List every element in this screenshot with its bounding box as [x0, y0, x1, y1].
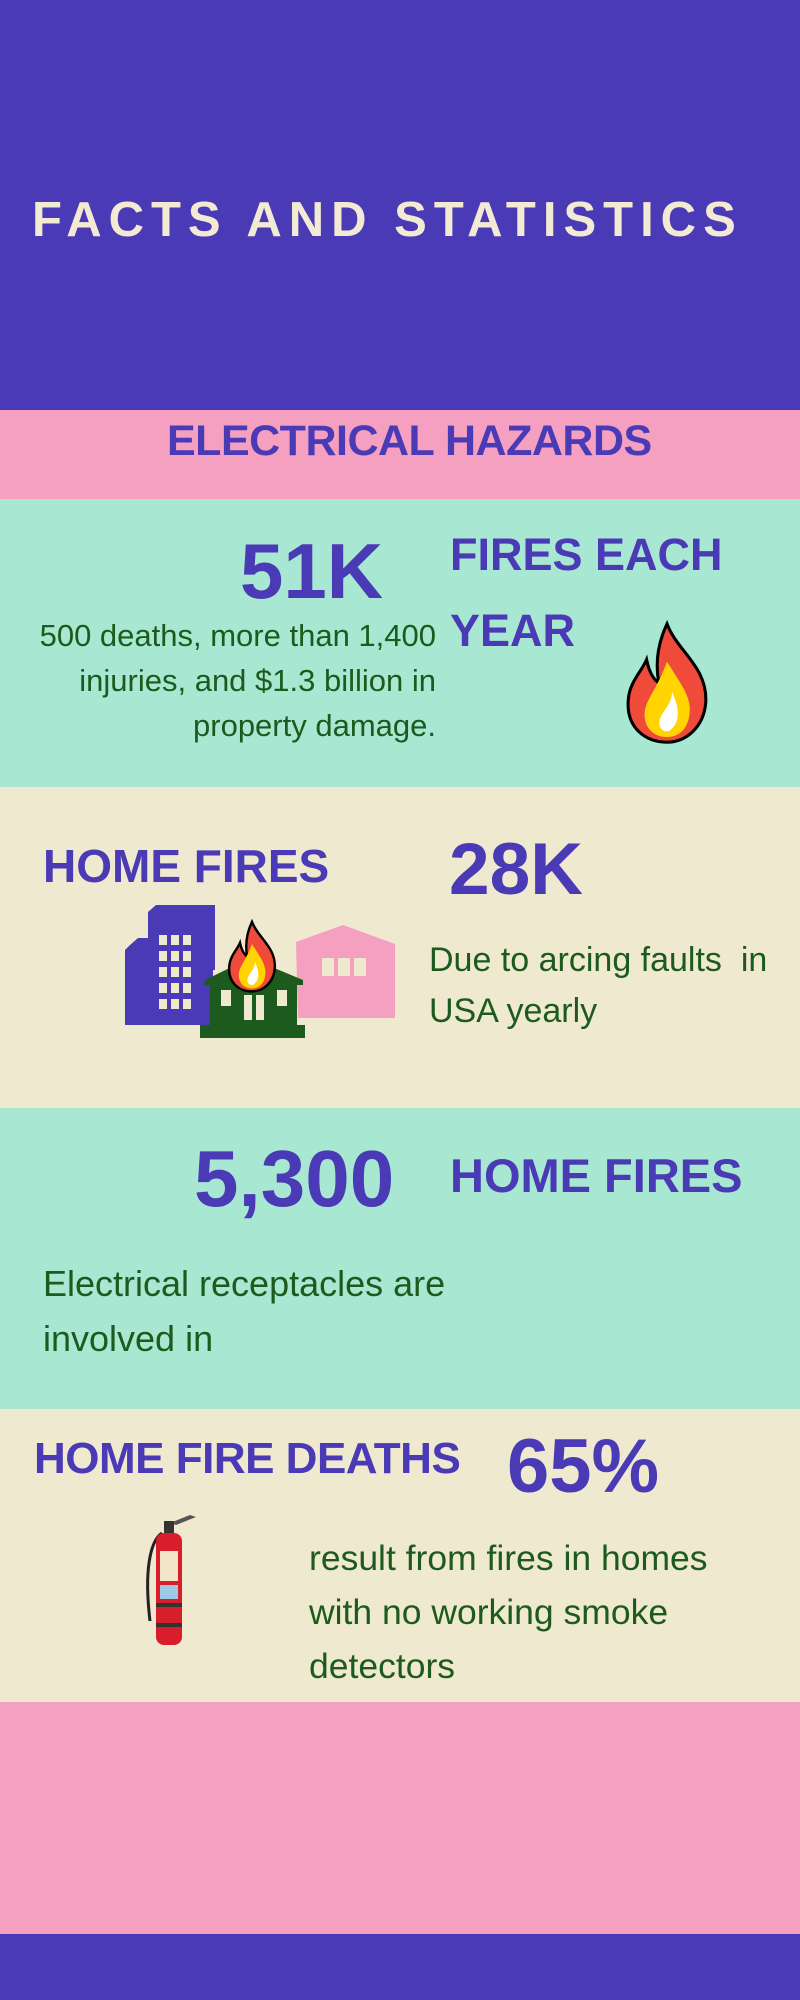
panel: 51K fires	[0, 499, 800, 787]
label: fires each year: FIRES EACH YEAR	[450, 529, 723, 656]
footer pink band	[0, 1702, 800, 1934]
label: home fires: HOME FIRES	[450, 1149, 742, 1202]
icon: fire extinguisher	[146, 1515, 196, 1645]
heading: home fire deaths: HOME FIRE DEATHS	[34, 1434, 460, 1483]
panel: home fires 28K	[0, 787, 800, 1108]
text: deaths injuries damage: 500 deaths, more than 1,400 injuries, and $1.3 billion in property damage.	[40, 618, 436, 743]
stat: 65%: 65%	[507, 1424, 659, 1509]
heading: electrical hazards: ELECTRICAL HAZARDS	[167, 417, 652, 465]
text: arcing faults: Due to arcing faults in	[429, 941, 767, 979]
panel: home fire deaths 65%	[0, 1409, 800, 1702]
text: no smoke detectors	[309, 1538, 708, 1686]
text: receptacles: Electrical receptacles are	[43, 1263, 445, 1304]
stat: 28K: 28K	[449, 829, 583, 910]
text: receptacles	[43, 1263, 445, 1359]
section heading band	[0, 410, 800, 499]
stat: 5,300: 5,300	[194, 1134, 394, 1223]
icon: buildings on fire	[125, 905, 395, 1038]
text: receptacles: involved in	[43, 1318, 213, 1359]
panel: 5,300 home fires	[0, 1108, 800, 1409]
heading: home fires: HOME FIRES	[43, 840, 329, 892]
text: arcing faults	[429, 941, 767, 1030]
text: no smoke detectors: result from fires in homes	[309, 1538, 708, 1578]
text: no smoke detectors: detectors	[309, 1646, 455, 1686]
header band	[0, 0, 800, 410]
footer purple band	[0, 1934, 800, 2000]
text: no smoke detectors: with no working smoke	[309, 1592, 668, 1632]
icon: flame	[626, 620, 708, 744]
stat: 51K: 51K	[240, 527, 383, 615]
text: arcing faults: USA yearly	[429, 992, 597, 1030]
title: FACTS AND STATISTICS	[32, 193, 743, 247]
